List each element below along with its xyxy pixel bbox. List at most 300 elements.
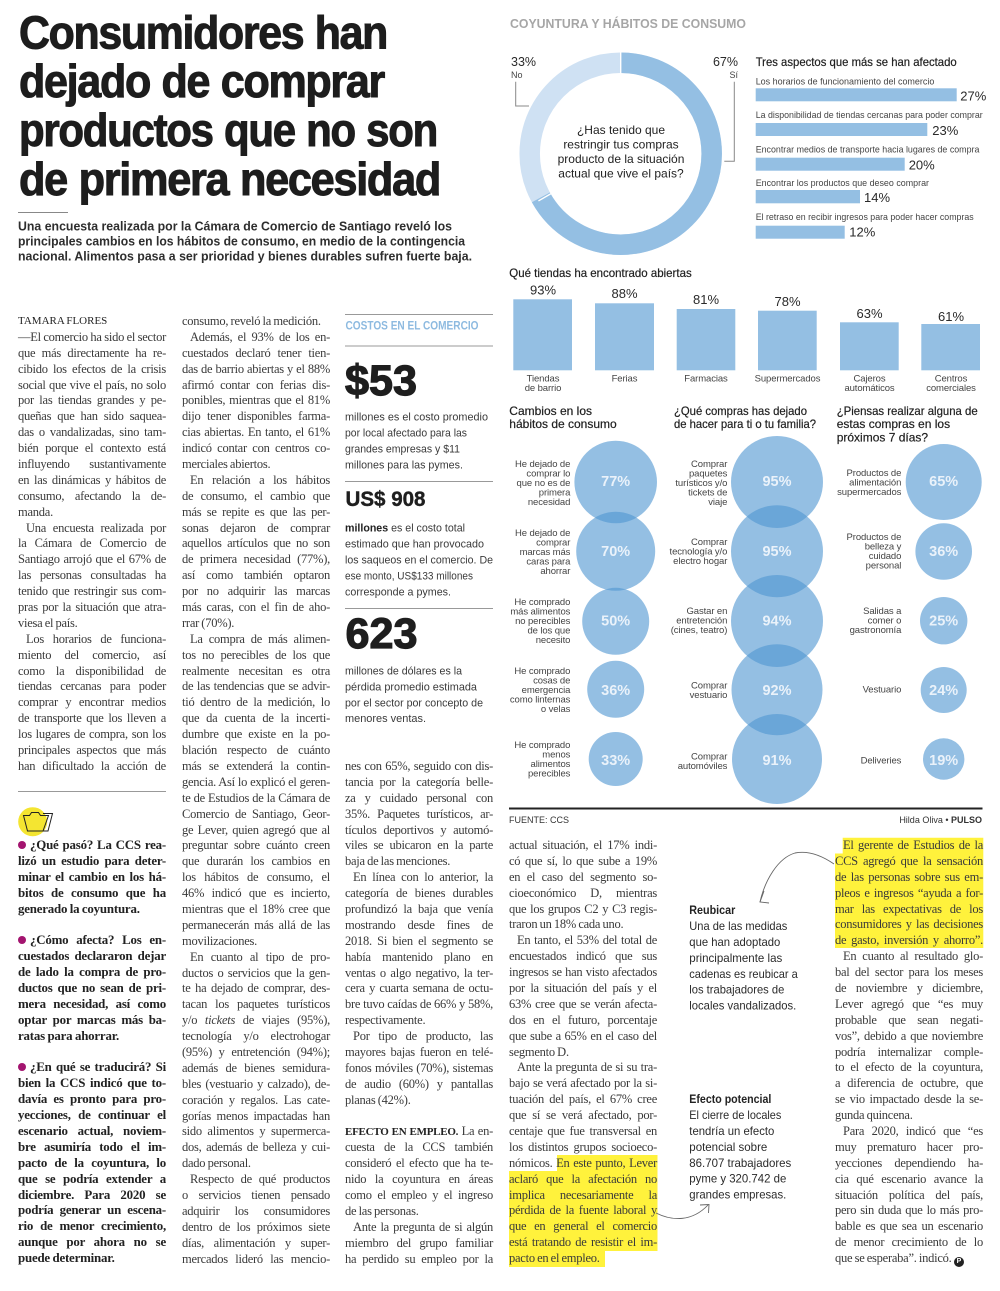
- bubble chart: piensas realizar: Salidas a: [863, 606, 902, 617]
- article column 3: cera y cuarta semana de octu-: [345, 981, 493, 995]
- bubble chart: piensas realizar: cuidado: [869, 551, 901, 562]
- bubble chart: qué compras has dejado: Comprar: [691, 537, 727, 548]
- horizontal bar chart: tres aspectos: El retraso en recibir ingresos para poder hacer compras: [756, 212, 974, 223]
- article column 1: [18, 315, 166, 773]
- article column 1: de transporte que los lleven a: [18, 711, 166, 725]
- subtitle: principales cambios en los hábitos de consumo, en medio de la contingencia: [18, 234, 466, 249]
- bubble chart: cambios en los hábitos: comprar lo: [526, 468, 570, 480]
- article column 4: pérdida de la fuente laboral y: [509, 1203, 657, 1217]
- article column 1: TAMARA FLORES: [18, 315, 107, 327]
- article column 1: por las tiendas grandes y pe-: [18, 393, 166, 407]
- bubble chart: cambios en los hábitos: necesito: [536, 635, 570, 646]
- article column 4: centaje que fue transversal en: [509, 1124, 657, 1138]
- article column 2: días, alimentación y super-: [182, 1236, 330, 1250]
- bubble chart: cambios en los hábitos: necesidad: [528, 497, 570, 508]
- article column 2: mercados lideró las mencio-: [182, 1252, 330, 1266]
- article column 5: [835, 838, 984, 1267]
- article column 4: [509, 838, 658, 1265]
- key points box: ¿Qué pasó? La CCS rea-: [30, 838, 166, 852]
- panel: costos en el comercio: COSTOS EN EL COMERCIO: [346, 320, 479, 332]
- bubble chart: qué compras has dejado: (cines, teatro): [671, 625, 727, 636]
- article column 2: tos no perecibles de los que: [182, 648, 330, 662]
- horizontal bar chart: tres aspectos: Los horarios de funcionamiento del comercio: [756, 77, 934, 88]
- article column 5: CCS agregó que la sensación: [835, 854, 983, 868]
- article column 2: merciales abiertos.: [182, 457, 270, 471]
- article column 3: bre tuvo caídas de 66% y 58%,: [345, 997, 493, 1011]
- article column 2: que durarán los cambios en: [182, 854, 330, 868]
- bubble chart: cambios en los hábitos: emergencia: [522, 685, 571, 696]
- panel: costos en el comercio: ese monto, US$133 millones: [345, 570, 473, 582]
- bubble chart: piensas realizar: comer o: [868, 616, 901, 626]
- article column 5: El gerente de Estudios de la: [843, 838, 983, 852]
- article column 4: los distintos grupos socioeco-: [509, 1140, 657, 1154]
- bubble chart: qué compras has dejado: 95%: [762, 474, 792, 490]
- article column 4: bajo se verá afectado por la si-: [509, 1076, 657, 1090]
- note: efecto potencial: pyme y 320.742 de: [689, 1172, 786, 1186]
- article column 3: viles se ubicaron en la parte: [345, 838, 493, 852]
- bubble chart: piensas realizar: 65%: [929, 474, 958, 490]
- article column 2: gencia. Así lo explicó el geren-: [182, 775, 330, 789]
- article column 2: dado personal.: [182, 1156, 251, 1170]
- title: dejado de comprar: [19, 55, 385, 107]
- article column 4: implica necesariamente la: [509, 1188, 657, 1202]
- article column 3: Por tipo de producto, las: [353, 1029, 493, 1043]
- article column 2: más se repite es que las per-: [182, 505, 330, 519]
- column chart: tiendas abiertas: automáticos: [844, 383, 895, 394]
- arrow: reubicar: [760, 852, 834, 903]
- key points box: [18, 838, 166, 1265]
- article column 2: Respecto de qué productos: [190, 1172, 330, 1186]
- bubble chart: cambios en los hábitos: primera: [539, 488, 571, 498]
- bubble chart: piensas realizar: belleza y: [865, 542, 902, 552]
- article column 4: por la situación del país y el: [509, 981, 657, 995]
- subtitle: Una encuesta realizada por la Cámara de Comercio de Santiago reveló los: [18, 219, 452, 234]
- article column 2: La compra de más alimen-: [190, 632, 330, 646]
- article column 5: bal del sector para los meses: [835, 965, 983, 979]
- article column 5: muy prematuro hacer pro-: [835, 1140, 983, 1154]
- key points box: podría generar un escena-: [18, 1203, 166, 1217]
- article column 2: dos, además de belleza y cui-: [182, 1140, 330, 1154]
- article column 2: ponibles, mientras que el 81%: [182, 393, 330, 407]
- article column 2: Comercio de Santiago, Geor-: [182, 807, 330, 821]
- article column 2: te de Estudios de la Cámara de: [182, 791, 330, 805]
- article column 2: blación respecto de cuánto: [182, 743, 330, 757]
- article column 1: cibido los efectos de la crisis: [18, 362, 166, 376]
- highlight: lower middle column: [509, 1155, 658, 1267]
- key points box: bien la CCS indicó que to-: [18, 1076, 166, 1090]
- column chart: tiendas abiertas: Supermercados: [755, 374, 821, 384]
- article column 4: que sube a 65% en el caso del: [509, 1029, 657, 1043]
- article column 1: social que vive el país, no solo: [18, 378, 166, 392]
- article column 5: bable es que sea un escenario: [835, 1219, 983, 1233]
- note: reubicar: cadenas es reubicar a: [689, 968, 798, 981]
- bubble chart: piensas realizar: 25%: [929, 614, 958, 630]
- bubble chart: piensas realizar: Vestuario: [863, 685, 901, 696]
- bubble chart: cambios en los hábitos: o velas: [541, 704, 571, 715]
- note: reubicar: los trabajadores de: [689, 984, 784, 996]
- article column 1: consumo, afectando la de-: [18, 489, 166, 503]
- bubble chart: cambios en los hábitos: He comprado: [514, 597, 570, 608]
- donut chart: actual que vive el país?: [558, 167, 684, 181]
- title: [19, 6, 440, 205]
- article column 3: de audio (60%) y pantallas: [345, 1077, 493, 1091]
- panel: costos en el comercio: los saqueos en el comercio. De: [345, 554, 493, 566]
- article column 3: tancia por la categoría belle-: [345, 775, 493, 789]
- panel: costos en el comercio: millones es el costo total: [345, 522, 465, 534]
- bubble chart: qué compras has dejado: electro hogar: [673, 556, 727, 567]
- article column 2: dijo tener disponibles farma-: [182, 409, 330, 423]
- article column 3: tículos deportivos y automó-: [345, 823, 493, 837]
- article column 2: [182, 314, 330, 1266]
- note: reubicar: principalmente las: [689, 952, 782, 965]
- article column 2: y/o tickets de viajes (95%),: [182, 1013, 330, 1027]
- article column 4: Ante la pregunta de si su tra-: [517, 1060, 657, 1074]
- article column 3: 2018. Si bien el segmento se: [345, 934, 493, 948]
- bubble chart: qué compras has dejado: [670, 404, 823, 804]
- article column 1: que más directamente ha re-: [18, 346, 166, 360]
- article column 3: mostrando desde fines de: [345, 918, 493, 932]
- donut chart: Sí: [729, 70, 738, 80]
- article column 4: está tratando de resistir el im-: [509, 1235, 657, 1249]
- article column 2: que da cuenta de la incerti-: [182, 711, 330, 725]
- article column 2: además de bienes semidura-: [182, 1061, 330, 1075]
- article column 1: queñas que han sido saquea-: [18, 409, 166, 423]
- article column 2: así como también optaron: [182, 568, 330, 582]
- note: reubicar: [689, 903, 798, 1012]
- article column 2: dentro de los próximos siete: [182, 1220, 330, 1234]
- article column 5: de gasto, inversión y ahorro”.: [835, 933, 983, 947]
- panel: costos en el comercio: millones para las pymes.: [345, 460, 463, 472]
- horizontal bar chart: tres aspectos: 14%: [864, 190, 890, 205]
- bubble chart: cambios en los hábitos: 33%: [601, 753, 630, 769]
- key points box: ¿Cómo afecta? Los en-: [30, 933, 166, 947]
- key points box: lizó un estudio para deter-: [18, 854, 166, 868]
- panel: costos en el comercio: pérdida promedio estimada: [345, 682, 478, 694]
- article column 2: (95%) y entretención (94%);: [182, 1045, 330, 1059]
- bubble chart: qué compras has dejado: viaje: [708, 497, 727, 508]
- note: reubicar: Reubicar: [689, 903, 736, 917]
- article column 5: Lever agregó que “es muy: [835, 997, 983, 1011]
- article column 5: P: [957, 1258, 961, 1265]
- bubble chart: piensas realizar: 36%: [929, 544, 958, 560]
- key points box: que se podría extender a: [18, 1172, 166, 1186]
- article column 2: de consumo, el cambio que: [182, 489, 330, 503]
- article column 3: baja de las menciones.: [345, 854, 450, 868]
- article column 2: aquellos artículos que no son: [182, 536, 330, 550]
- column chart: tiendas abiertas: Tiendas: [527, 374, 560, 384]
- bubble chart: qué compras has dejado: ¿Qué compras has dejado: [674, 404, 807, 418]
- article column 3: consideró el efecto que ha te-: [345, 1156, 493, 1170]
- article column 3: profundizó la baja que venía: [345, 902, 493, 916]
- article column 2: afirmó contar con ferias dis-: [182, 378, 330, 392]
- note: reubicar: Una de las medidas: [689, 920, 787, 933]
- column chart: tiendas abiertas: comerciales: [926, 383, 976, 394]
- article column 5: Para 2020, indicó que “es: [843, 1124, 983, 1138]
- key points box: generado la coyuntura.: [18, 902, 140, 916]
- article column 1: como la disponibilidad de: [18, 664, 166, 678]
- article column 1: —El comercio ha sido el sector: [18, 330, 166, 344]
- article column 2: bles (vestuario y calzado), de-: [182, 1077, 330, 1091]
- bubble chart: cambios en los hábitos: que no es de: [517, 478, 570, 489]
- note: reubicar: que han adoptado: [689, 936, 780, 949]
- bubble chart: qué compras has dejado: 94%: [762, 614, 792, 630]
- bubble chart: cambios en los hábitos: He dejado de: [515, 528, 570, 539]
- article column 2: mientras que el 18% cree que: [182, 902, 330, 916]
- column chart: tiendas abiertas: Ferias: [612, 374, 638, 384]
- article column 5: gunda quincena.: [835, 1108, 913, 1122]
- horizontal bar chart: tres aspectos: 20%: [909, 158, 935, 173]
- article column 2: cias abiertas. En tanto, el 61%: [182, 425, 330, 439]
- donut chart: ¿Has tenido que: [577, 123, 665, 137]
- article column 5: se vio impactado desde la se-: [835, 1092, 983, 1106]
- article column 1: manda.: [18, 505, 53, 519]
- article column 2: más se extenderá la contin-: [182, 759, 330, 773]
- article column 5: pero sin duda que lo más pro-: [835, 1203, 983, 1217]
- article column 3: En línea con lo anterior, la: [353, 870, 493, 884]
- icon: folder on yellow circle: [18, 807, 52, 836]
- column chart: tiendas abiertas: 81%: [693, 292, 719, 307]
- column chart: tiendas abiertas: 88%: [611, 286, 638, 301]
- key points box: mera necesidad, así como: [18, 997, 166, 1011]
- bubble chart: piensas realizar: supermercados: [837, 487, 902, 498]
- bubble chart: piensas realizar: próximos 7 días?: [837, 430, 928, 444]
- key points box: aunque por ahora no se: [18, 1235, 166, 1249]
- article column 3: respectivamente.: [345, 1013, 425, 1027]
- bubble chart: piensas realizar: ¿Piensas realizar alguna de: [837, 404, 978, 418]
- article column 2: indicó contar con centros co-: [182, 441, 330, 455]
- key points box: davía es pronto para pro-: [18, 1092, 166, 1106]
- article column 4: nómicos. En este punto, Lever: [509, 1156, 657, 1170]
- horizontal bar chart: tres aspectos: Tres aspectos que más se han afectado: [756, 55, 957, 69]
- bubble chart: cambios en los hábitos: 50%: [601, 614, 630, 630]
- title: productos que no son: [19, 104, 437, 156]
- bubble chart: qué compras has dejado: 91%: [762, 753, 792, 769]
- article column 2: gorías menos impactadas han: [182, 1109, 330, 1123]
- article column 2: consumo, reveló la medición.: [182, 314, 321, 328]
- bubble chart: cambios en los hábitos: He comprado: [514, 666, 570, 677]
- bubble chart: piensas realizar: [837, 404, 982, 780]
- article column 4: actual situación, el 17% indi-: [509, 838, 657, 852]
- article column 1: la Cámara de Comercio de: [18, 536, 166, 550]
- article column 4: aclaró que la afectación no: [509, 1172, 657, 1186]
- panel: costos en el comercio: US$ 908: [346, 488, 426, 511]
- column chart: tiendas abiertas: Cajeros: [853, 374, 886, 384]
- bubble chart: cambios en los hábitos: cosas de: [533, 676, 570, 686]
- key points box: bitos de consumo que ha: [18, 886, 166, 900]
- column chart: tiendas abiertas: Centros: [935, 374, 968, 384]
- article column 4: 63% cree que se verán afecta-: [509, 997, 657, 1011]
- article column 3: miembro del grupo familiar: [345, 1236, 493, 1250]
- donut chart: 33%: [511, 55, 536, 69]
- panel: costos en el comercio: [345, 314, 493, 725]
- horizontal bar chart: tres aspectos: [756, 55, 987, 240]
- article column 2: rrar (70%).: [182, 616, 234, 630]
- panel: costos en el comercio: 623: [346, 610, 418, 658]
- article column 5: de menor crecimiento de lo: [835, 1235, 983, 1249]
- article column 3: 35%. Paquetes turísticos, ar-: [345, 807, 493, 821]
- key points box: bre asumiría todo el im-: [18, 1140, 166, 1154]
- bubble chart: cambios en los hábitos: 36%: [601, 683, 630, 699]
- article column 2: realmente necesitan es otra: [182, 664, 330, 678]
- bubble chart: cambios en los hábitos: He dejado de: [515, 459, 570, 470]
- bubble chart: cambios en los hábitos: alimentos: [531, 759, 571, 770]
- article column 2: Además, el 93% de los en-: [190, 330, 330, 344]
- bubble chart: cambios en los hábitos: caras para: [526, 556, 571, 568]
- key points box: cuestados declararon dejar: [18, 949, 166, 963]
- article column 1: viesa el país.: [18, 616, 78, 630]
- key points box: escenario actual, noviem-: [18, 1124, 166, 1138]
- panel: costos en el comercio: millones es el costo promedio: [345, 412, 488, 424]
- source line: Hilda Oliva • PULSO: [899, 815, 982, 825]
- article column 5: que se esperaba”. indicó.: [835, 1251, 952, 1265]
- article column 5: to el efecto de la coyuntura,: [835, 1060, 983, 1074]
- article column 2: o servicios tienen pensado: [182, 1188, 330, 1202]
- column chart: tiendas abiertas: 61%: [938, 309, 964, 324]
- article column 4: dos en el futuro, porcentaje: [509, 1013, 657, 1027]
- bubble chart: qué compras has dejado: tecnología y/o: [670, 546, 727, 558]
- bubble chart: cambios en los hábitos: ahorrar: [540, 566, 570, 577]
- article column 2: preguntar sobre cuánto creen: [182, 838, 330, 852]
- bubble chart: cambios en los hábitos: de los que: [527, 626, 570, 636]
- arrow: efecto potencial: [656, 1204, 709, 1219]
- bubble chart: piensas realizar: personal: [866, 560, 901, 572]
- bubble chart: piensas realizar: estas compras en los: [837, 417, 950, 431]
- article column 5: mar las expectativas de los: [835, 902, 983, 916]
- subtitle: [18, 219, 472, 264]
- article column 3: cuesta de la CCS también: [345, 1140, 493, 1154]
- bubble chart: piensas realizar: 19%: [929, 753, 958, 769]
- bubble chart: qué compras has dejado: vestuario: [690, 690, 727, 701]
- article column 3: ventas o algo negativo, la ter-: [345, 966, 493, 980]
- article column 3: Ante la pregunta de si algún: [353, 1220, 493, 1234]
- article column 4: que los grupos C2 y C3 regis-: [509, 902, 657, 916]
- article column 3: de las personas.: [345, 1204, 419, 1218]
- bubble chart: cambios en los hábitos: 70%: [601, 544, 630, 560]
- panel: costos en el comercio: grandes empresas y $11: [345, 444, 460, 456]
- horizontal bar chart: tres aspectos: 23%: [932, 123, 959, 138]
- article column 2: tacan los paquetes turísticos: [182, 997, 330, 1011]
- article column 3: ha perdido su empleo por la: [345, 1252, 493, 1266]
- panel: costos en el comercio: estimado que han provocado: [345, 538, 484, 550]
- article column 2: ductos o servicios que la gen-: [182, 966, 330, 980]
- bubble chart: qué compras has dejado: Comprar: [691, 752, 727, 762]
- bubble chart: qué compras has dejado: automóviles: [678, 761, 728, 772]
- article column 2: dumbre que existe en la po-: [182, 727, 330, 741]
- bubble chart: cambios en los hábitos: marcas más: [520, 547, 571, 558]
- key points box: optar por marcas más ba-: [18, 1013, 166, 1027]
- column chart: tiendas abiertas: Farmacias: [684, 374, 728, 384]
- article column 4: que en general el comercio: [509, 1219, 657, 1233]
- article column 2: adquirir los consumidores: [182, 1204, 330, 1218]
- bubble chart: cambios en los hábitos: 77%: [601, 474, 630, 490]
- horizontal bar chart: tres aspectos: Encontrar los productos que deseo comprar: [756, 178, 929, 189]
- key points box: pacto de la coyuntura, lo: [18, 1156, 166, 1170]
- bubble chart: cambios en los hábitos: como linternas: [510, 694, 571, 706]
- key points box: de lado la compra de pro-: [18, 965, 166, 979]
- panel: costos en el comercio: por local afectado para las: [345, 428, 467, 440]
- article column 1: pras por la situación que atra-: [18, 600, 166, 614]
- article column 1: las personas consultadas ha: [18, 568, 166, 582]
- panel: costos en el comercio: menores ventas.: [345, 713, 426, 725]
- article column 3: nes con 65%, seguido con dis-: [345, 759, 493, 773]
- article column 2: En relación a los hábitos: [190, 473, 330, 487]
- column chart: tiendas abiertas: 93%: [530, 282, 556, 298]
- article column 2: En cuanto al tipo de pro-: [190, 950, 330, 964]
- bubble chart: cambios en los hábitos: hábitos de consumo: [509, 417, 617, 431]
- article column 1: han dificultado la acción de: [18, 759, 166, 773]
- article column 3: había mantenido plano en: [345, 950, 493, 964]
- article column 5: podría internalizar comple-: [835, 1045, 983, 1059]
- article column 4: que sí se verá afectado, por-: [509, 1108, 657, 1122]
- horizontal bar chart: tres aspectos: 12%: [849, 225, 876, 240]
- article column 2: por no adquirir las marcas: [182, 584, 330, 598]
- bubble chart: piensas realizar: alimentación: [849, 478, 901, 488]
- note: efecto potencial: Efecto potencial: [689, 1092, 771, 1106]
- bubble chart: qué compras has dejado: entretención: [676, 616, 727, 626]
- article column 5: consumidores y las decisiones: [835, 917, 983, 931]
- key points box: minar el cambio en los há-: [18, 870, 166, 884]
- article column 2: cuestados declaró tener tien-: [182, 346, 330, 360]
- article column 2: permanecerán más allá de las: [182, 918, 330, 932]
- bubble chart: qué compras has dejado: 92%: [762, 683, 792, 699]
- source line: FUENTE: CCS: [509, 815, 569, 825]
- article column 1: das o vandalizadas, sino tam-: [18, 425, 166, 439]
- donut chart: restringir tus compras: [563, 137, 679, 151]
- note: efecto potencial: tendría un efecto: [689, 1125, 774, 1138]
- bubble chart: cambios en los hábitos: perecibles: [528, 768, 571, 780]
- article column 1: comprar y encontrar medios: [18, 695, 166, 709]
- key points box: diciembre. Para 2020 se: [18, 1188, 166, 1202]
- bubble chart: qué compras has dejado: turísticos y/o: [675, 478, 727, 489]
- donut chart: No: [511, 70, 523, 80]
- title: Consumidores han: [19, 6, 387, 58]
- key points box: puede determinar.: [18, 1251, 115, 1265]
- article column 3: mayores bajas fueron en telé-: [345, 1045, 493, 1059]
- bubble chart: cambios en los hábitos: [509, 404, 657, 786]
- bubble chart: piensas realizar: Deliveries: [861, 756, 902, 767]
- article column 4: traron un 18% cada uno.: [509, 917, 623, 931]
- article column 3: categoría de bienes durables: [345, 886, 493, 900]
- bubble chart: qué compras has dejado: de hacer para ti o tu familia?: [674, 417, 816, 431]
- article column 5: probable que sean negati-: [835, 1013, 983, 1027]
- article column 3: [345, 759, 494, 1266]
- article column 2: de las tendencias que se advir-: [182, 679, 330, 693]
- article column 2: das de barrio abiertas y el 88%: [182, 362, 330, 376]
- article column 4: encuestados indicó que sus: [509, 949, 657, 963]
- article column 2: sido alimentos y supermerca-: [182, 1124, 330, 1138]
- article column 2: tió dentro de la medición, lo: [182, 695, 330, 709]
- article column 4: en el caso del segmento so-: [509, 870, 657, 884]
- article column 5: de las personas sobre sus em-: [835, 870, 983, 884]
- article column 2: 46% indicó que es incierto,: [182, 886, 330, 900]
- article column 5: vos”, debido a que noviembre: [835, 1029, 983, 1043]
- section heading: coyuntura: COYUNTURA Y HÁBITOS DE CONSUMO: [510, 16, 746, 31]
- key points box: yecciones, de continuar el: [18, 1108, 166, 1122]
- bubble chart: qué compras has dejado: Comprar: [691, 680, 727, 692]
- key points box: ¿En qué se traducirá? Si: [30, 1060, 166, 1074]
- article column 4: En tanto, el 53% del total de: [517, 933, 657, 947]
- article column 5: a diferencia de octubre, que: [835, 1076, 983, 1090]
- article column 2: los hábitos de consumo, el: [182, 870, 330, 884]
- bubble chart: cambios en los hábitos: comprar: [536, 538, 570, 548]
- article column 1: los lugares de compra, son los: [18, 727, 166, 741]
- horizontal bar chart: tres aspectos: Encontrar medios de transporte hacia lugares de compra: [756, 144, 980, 155]
- subtitle: nacional. Alimentos pasa a ser prioridad y bienes durables sufren fuerte baja.: [18, 249, 472, 264]
- article column 1: tenido que restringir sus com-: [18, 584, 166, 598]
- bubble chart: qué compras has dejado: tickets de: [688, 488, 727, 498]
- key points box: ratas para ahorrar.: [18, 1029, 119, 1043]
- article column 4: cioeconómico D, mientras: [509, 886, 657, 900]
